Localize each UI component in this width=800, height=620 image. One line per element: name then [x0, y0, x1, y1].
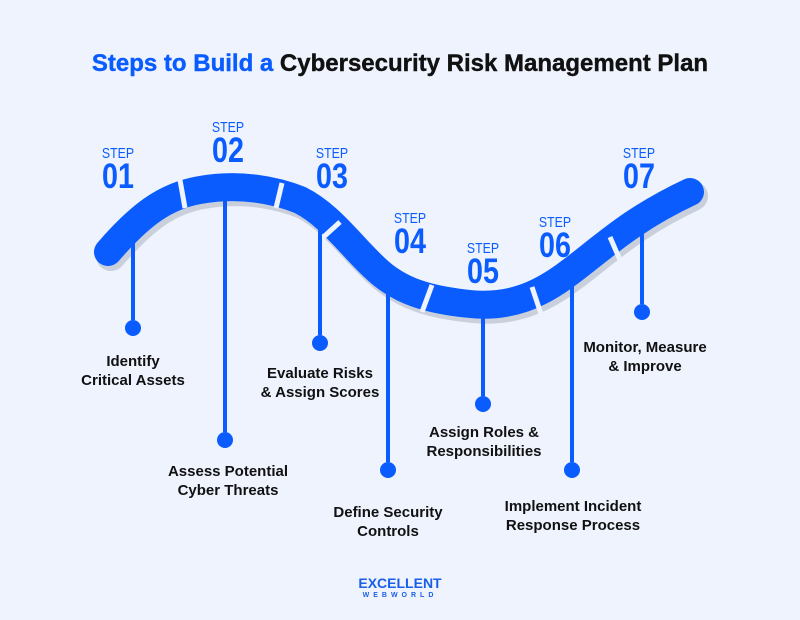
step labels: STEP	[102, 145, 134, 162]
text: 06	[539, 226, 571, 265]
text: STEP	[467, 240, 499, 257]
text: STEP	[316, 145, 348, 162]
step labels: 01	[102, 157, 134, 196]
text: Implement Incident	[505, 498, 641, 515]
text: Assign Roles &	[429, 424, 539, 441]
text: Monitor, Measure	[583, 339, 707, 356]
text: STEP	[539, 214, 571, 231]
text: & Assign Scores	[261, 384, 379, 401]
text: 07	[623, 157, 655, 196]
text: 05	[467, 252, 499, 291]
step texts	[81, 353, 185, 389]
text: Evaluate Risks	[267, 365, 373, 382]
text: STEP	[394, 210, 426, 227]
text: Responsibilities	[426, 443, 542, 460]
text: 04	[394, 222, 426, 261]
text: Controls	[357, 523, 419, 540]
wave	[108, 187, 690, 305]
step texts: Identify	[106, 353, 160, 370]
text: Define Security	[333, 504, 443, 521]
text: Response Process	[506, 517, 640, 534]
text: STEP	[623, 145, 655, 162]
logo: WEBWORLD	[363, 592, 437, 599]
text: 02	[212, 131, 244, 170]
logo: EXCELLENT	[358, 575, 442, 591]
text: Cyber Threats	[178, 482, 278, 499]
text: & Improve	[608, 358, 682, 375]
step texts: Critical Assets	[81, 372, 185, 389]
text: STEP	[212, 119, 244, 136]
text: 03	[316, 157, 348, 196]
text: Assess Potential	[168, 463, 288, 480]
drips	[125, 195, 650, 478]
logo	[358, 575, 442, 599]
title: Steps to Build a Cybersecurity Risk Management Plan	[92, 50, 708, 77]
